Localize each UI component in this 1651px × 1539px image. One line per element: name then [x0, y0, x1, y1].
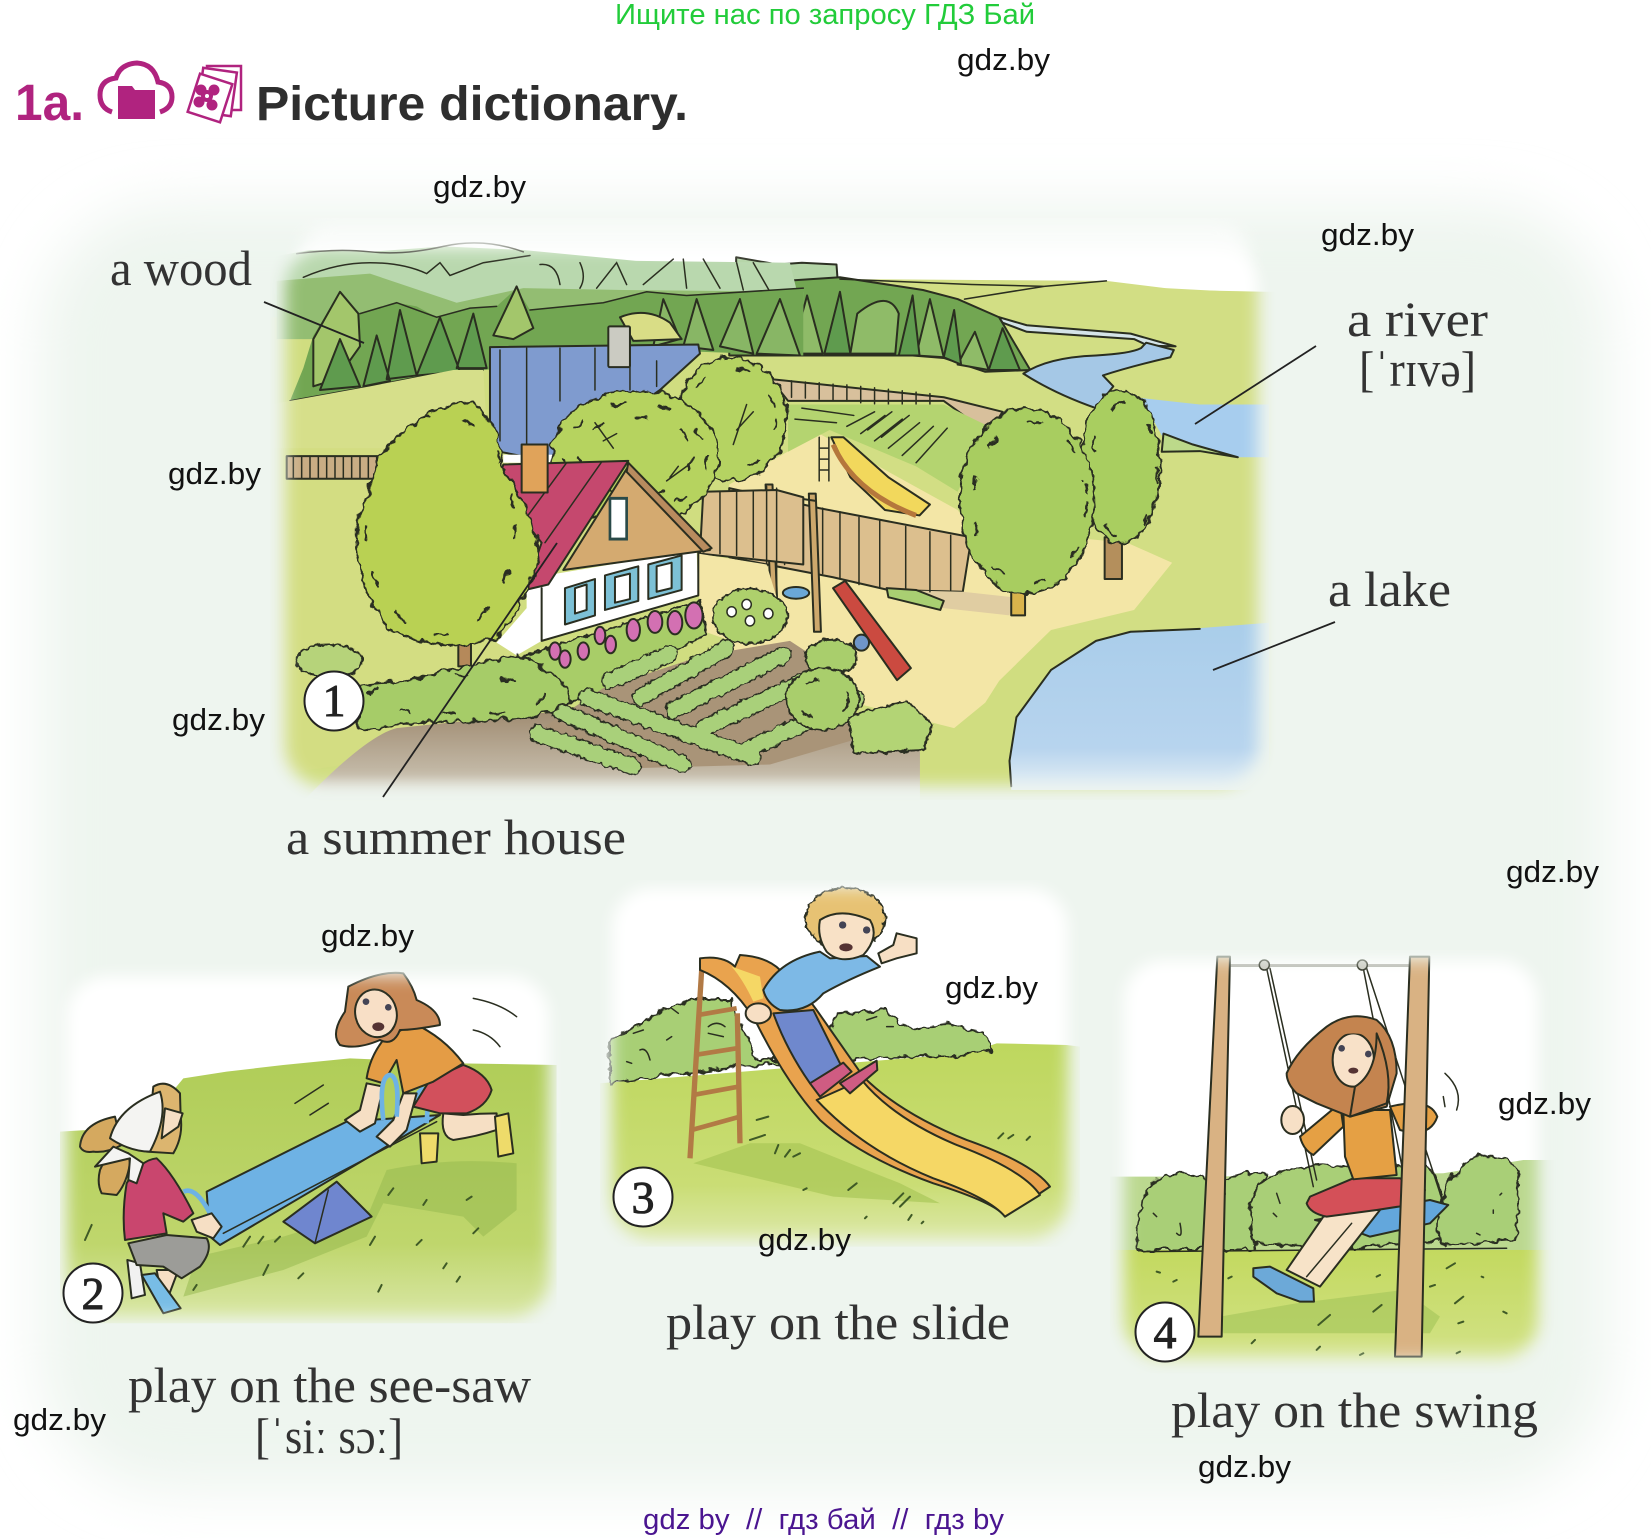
watermark: gdz.by [321, 918, 415, 953]
bush flecks [627, 1008, 893, 1063]
big tree trunk [458, 619, 471, 666]
watermark: gdz.by [13, 1402, 107, 1437]
shoe right [840, 1061, 877, 1093]
building boards [500, 348, 657, 452]
sky [50, 960, 570, 1133]
arm left [345, 1083, 383, 1132]
sky [1110, 950, 1560, 1183]
gable window [610, 498, 627, 539]
crop lines [795, 408, 947, 463]
swing posts [766, 485, 821, 632]
leg [443, 1113, 497, 1140]
sky [600, 880, 1080, 1080]
flower bush [713, 589, 787, 643]
window right [648, 555, 682, 599]
far hill outline [297, 243, 770, 292]
torso [367, 1023, 463, 1093]
ropes [1267, 968, 1443, 1203]
grass [1110, 1250, 1560, 1373]
ponytail upper [80, 1117, 122, 1152]
windows [565, 555, 682, 625]
roof [497, 461, 628, 590]
grass flecks [750, 1117, 1030, 1223]
light mound [620, 313, 682, 341]
bush right [849, 701, 933, 754]
hedge [358, 655, 570, 732]
handle far [410, 1089, 428, 1123]
white flowers [727, 599, 773, 626]
icon: photo gallery [188, 66, 241, 122]
leg gap [1307, 1223, 1352, 1277]
watermark: gdz.by [1321, 217, 1415, 252]
leader lines: scene 1 [264, 302, 1335, 797]
bush middle [786, 668, 859, 730]
label: swing: play on the swing [1171, 1382, 1538, 1438]
bush by fence [887, 588, 944, 610]
face [1333, 1033, 1374, 1087]
bush [610, 1000, 993, 1083]
skirt [1307, 1178, 1425, 1217]
forest right trees [803, 294, 989, 371]
label: a river: a river [1347, 291, 1488, 347]
fence right of house [700, 490, 803, 565]
meadow below forest [270, 370, 490, 521]
slide bed [817, 1080, 1040, 1217]
tree trunk front [1011, 590, 1025, 615]
crop field [788, 405, 989, 492]
roof lines [527, 462, 602, 543]
icon: cloud folder [100, 63, 172, 119]
thin river [999, 317, 1176, 346]
pale fence stub [287, 456, 383, 479]
torso [1343, 1110, 1397, 1179]
girl right [336, 973, 513, 1163]
wooden fence [729, 488, 971, 592]
handle near [382, 1075, 397, 1120]
hand raised [878, 933, 917, 963]
ladder [690, 970, 740, 1158]
seat [1315, 1200, 1448, 1237]
forest conifers [320, 310, 487, 390]
trousers [128, 1235, 209, 1278]
arm right [377, 1093, 417, 1147]
bed rows [537, 648, 857, 766]
label: a summer house: a summer house [286, 809, 626, 865]
bush right [1438, 1156, 1518, 1245]
tree back [1080, 389, 1160, 543]
shadow [1220, 1290, 1440, 1333]
shoes [810, 1063, 852, 1097]
wall edge [542, 550, 698, 641]
hair front [147, 1084, 181, 1153]
badge 2 [64, 1264, 122, 1322]
bed soil [537, 641, 857, 768]
label: see-saw: play on the see-saw [128, 1357, 531, 1413]
badge 1 [304, 672, 364, 730]
sky [1214, 272, 1258, 292]
see-saw support [854, 635, 869, 651]
blue building [490, 345, 700, 463]
river bank [1162, 434, 1238, 457]
bush left [1136, 1173, 1223, 1250]
lake shore [1010, 629, 1200, 786]
hair [336, 973, 440, 1047]
label: a lake: a lake [1328, 561, 1451, 617]
fence boards [720, 486, 777, 597]
hand [192, 1213, 222, 1238]
page background panel [40, 205, 1610, 1490]
fence lower strip [920, 590, 1010, 616]
red see-saw [833, 581, 911, 680]
crossbar [1223, 964, 1427, 967]
motion lines [295, 998, 517, 1115]
badge 3 [614, 1168, 672, 1226]
shoes [1253, 1267, 1314, 1302]
upper field line [840, 279, 1106, 299]
left post [1198, 957, 1230, 1337]
badge 3: 3 [632, 1172, 654, 1223]
window middle [605, 566, 638, 610]
grass [60, 1058, 557, 1323]
grass [600, 1043, 1080, 1247]
far field [860, 279, 1218, 291]
face [819, 913, 874, 959]
sand area [729, 434, 1172, 728]
hand [1281, 1106, 1304, 1134]
see-saw board [207, 1115, 440, 1245]
swing seat [783, 587, 809, 599]
hand on slide [746, 1003, 771, 1023]
flower bed bushes [517, 601, 707, 706]
base line [315, 1190, 328, 1243]
forest right trees [653, 299, 800, 355]
motion marks [1443, 1073, 1458, 1110]
arm left [1300, 1103, 1343, 1155]
exercise number: 1a. [15, 74, 84, 131]
ground line [1143, 1248, 1507, 1252]
slide rail [833, 445, 916, 515]
tulips [549, 602, 703, 668]
green backdrop [1110, 1160, 1560, 1260]
hair over shoulder [1350, 1033, 1389, 1117]
fringe [1330, 1022, 1377, 1040]
big lake [1010, 623, 1269, 790]
forest edges [290, 288, 803, 401]
watermark: gdz.by [957, 42, 1051, 77]
watermark: gdz.by [945, 970, 1039, 1005]
girl left [80, 1084, 222, 1313]
badge 1: 1 [322, 675, 346, 726]
fence boards [784, 507, 952, 592]
tree behind house [552, 390, 718, 525]
tree right of house [677, 357, 787, 481]
arm right [1390, 1103, 1437, 1132]
watermark: gdz.by [172, 702, 266, 737]
right post [1395, 957, 1429, 1357]
pasture meadow left [270, 448, 523, 775]
shoe blue [142, 1273, 181, 1313]
badge 4: 4 [1154, 1307, 1176, 1358]
river lower [1141, 398, 1269, 457]
face features [1338, 1045, 1372, 1074]
label: see-saw transcription: [ˈsiː sɔː] [255, 1408, 403, 1464]
board rail [223, 1122, 437, 1233]
grass flecks [85, 1188, 478, 1292]
shadow [183, 1161, 517, 1297]
legs [1287, 1210, 1380, 1287]
watermark: gdz.by [1198, 1449, 1292, 1484]
slide body [700, 955, 1050, 1217]
far hills right [735, 256, 838, 280]
panel: see-saw scene 2 [50, 960, 570, 1323]
scene halo [300, 225, 1250, 295]
watermark: gdz.by [168, 456, 262, 491]
forest tree shapes [313, 292, 360, 386]
heading: Picture dictionary. [256, 78, 688, 131]
roof edge [627, 463, 712, 552]
hair [805, 888, 885, 949]
shoe left [420, 1133, 438, 1163]
lower bushes [786, 640, 933, 754]
grey chimney [608, 326, 630, 367]
forest crown [493, 286, 533, 339]
ponytail lower [99, 1152, 130, 1195]
jumper [763, 952, 880, 1010]
shirt [124, 1158, 193, 1240]
tree trunk back [1105, 537, 1122, 579]
watermark: gdz.by [433, 169, 527, 204]
hair [1287, 1016, 1397, 1117]
panel: slide scene 3 [600, 880, 1080, 1247]
leg [157, 1270, 178, 1297]
slide top bed [732, 967, 763, 1002]
watermark: gdz.by [1506, 854, 1600, 889]
forest mass [290, 288, 803, 401]
handle [183, 1191, 213, 1220]
forest right darker [824, 292, 1020, 370]
right landscape: river, lake, sand, fence [729, 257, 1269, 790]
bush mid [1220, 1172, 1267, 1250]
small bush [296, 645, 363, 677]
watermark: gdz.by [758, 1222, 852, 1257]
panel: countryside scene 1 [270, 240, 1280, 801]
see-saw base [283, 1182, 372, 1243]
label: slide: play on the slide [666, 1294, 1010, 1350]
face [350, 985, 402, 1042]
river upper [1023, 343, 1174, 408]
orange chimney [522, 445, 548, 493]
far hills [270, 246, 803, 317]
grass flecks [1157, 1263, 1507, 1355]
meadow [270, 281, 1280, 800]
small slide [831, 437, 930, 515]
shoe right [495, 1113, 513, 1157]
face side [162, 1108, 183, 1138]
forest right part [729, 277, 1030, 372]
vegetable beds [537, 641, 857, 768]
stub stripes [293, 456, 377, 479]
big tree [356, 404, 540, 645]
mid hill [277, 274, 803, 339]
bed row outlines [537, 648, 857, 766]
house wall [497, 550, 698, 655]
eyes and mouth [363, 998, 392, 1031]
sand by house [698, 554, 803, 666]
face features [839, 921, 870, 951]
badge 4 [1136, 1302, 1194, 1362]
panes [575, 563, 672, 614]
bush top [805, 640, 857, 675]
label: river transcription: [ˈrɪvə] [1359, 341, 1476, 397]
badge 2: 2 [82, 1268, 104, 1319]
headscarf [110, 1092, 163, 1152]
branch marks [595, 405, 753, 481]
bush centre [1251, 1165, 1444, 1248]
jeans [773, 1010, 847, 1083]
watermark: gdz.by [1498, 1086, 1592, 1121]
fence stripes far [790, 380, 931, 404]
panel: swing scene 4 [1110, 950, 1560, 1373]
label: a wood: a wood [110, 240, 252, 296]
soil [303, 712, 920, 801]
gable [563, 466, 710, 570]
white band [503, 455, 560, 463]
tree front [959, 408, 1094, 594]
bushes [1136, 1156, 1518, 1250]
beige strip behind fence [774, 378, 1004, 424]
small ladder [819, 437, 829, 481]
shoe white [127, 1260, 145, 1298]
left landscape: forest, buildings, trees, house [270, 243, 920, 801]
bottom footer text: gdz by // гдз бай // гдз by [643, 1504, 1004, 1536]
shadow [693, 1143, 940, 1203]
bush flecks [1153, 1193, 1502, 1235]
window left [565, 579, 595, 625]
rings [1259, 960, 1367, 970]
skirt [413, 1065, 492, 1113]
scarf tail [95, 1147, 143, 1183]
